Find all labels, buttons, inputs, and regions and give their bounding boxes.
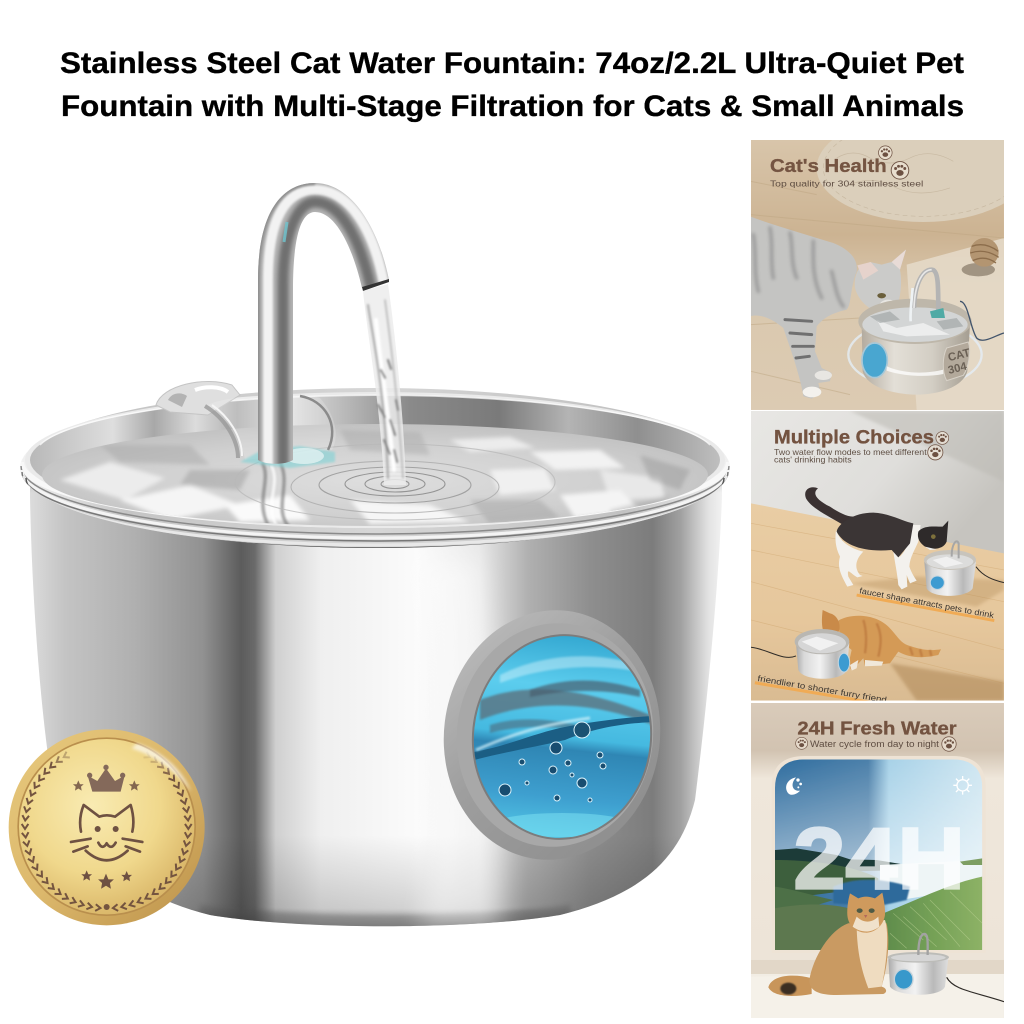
subheading with paw icons	[796, 737, 956, 751]
orange tabby cat	[822, 610, 941, 671]
large 24H text: 24H	[793, 810, 965, 907]
subheading	[774, 449, 927, 464]
panel: Multiple Choices	[751, 411, 1004, 706]
mini fountain: CAT	[947, 347, 972, 364]
panel: Cat's Health	[751, 140, 1004, 410]
mini fountain	[888, 934, 1004, 1002]
curved faucet	[258, 183, 389, 464]
moon icon	[786, 777, 802, 795]
wood floor	[751, 503, 1004, 701]
handwritten note with orange highlight: friendlier to shorter furry friend	[757, 673, 888, 705]
rug	[816, 140, 1004, 222]
handwritten note with orange highlight: faucet shape attracts pets to drink	[859, 585, 996, 620]
main product: stainless steel fountain	[20, 175, 740, 935]
fountain body	[30, 470, 740, 935]
title: Stainless Steel Cat Water Fountain: 74oz/2.2L Ultra-Quiet Pet	[60, 47, 964, 80]
ginger cat	[768, 893, 888, 996]
arch window frame	[776, 756, 982, 770]
upper mini fountain	[924, 541, 1004, 596]
title: Fountain with Multi-Stage Filtration for Cats & Small Animals	[61, 90, 964, 123]
cat face icon	[71, 805, 142, 860]
crown	[87, 765, 125, 792]
lower mini fountain	[751, 629, 850, 679]
grey tabby cat	[750, 216, 906, 399]
heading: Multiple Choices	[774, 427, 934, 448]
heading: 24H Fresh Water	[797, 718, 957, 739]
panel: 24H Fresh Water	[751, 703, 1004, 1018]
floor background	[751, 140, 1004, 410]
subheading: Top quality for 304 stainless steel	[770, 178, 923, 188]
laurel wreath	[22, 752, 192, 911]
wall	[751, 411, 1004, 554]
heading: Cat's Health	[770, 155, 887, 176]
bowl rim	[20, 388, 730, 548]
subheading with paw icons: Water cycle from day to night	[810, 739, 940, 749]
clear filter housing	[156, 382, 336, 468]
title	[60, 47, 964, 123]
gloss highlight	[132, 743, 192, 792]
subheading: Two water flow modes to meet different	[774, 447, 927, 457]
water stream	[363, 284, 406, 485]
ripples	[235, 444, 555, 520]
stars	[73, 780, 140, 889]
subheading: cats' drinking habits	[774, 455, 852, 465]
water level window	[444, 610, 660, 860]
paw icons	[879, 146, 909, 179]
water surface	[42, 424, 708, 528]
scratch ball	[962, 238, 999, 276]
mini fountain	[858, 270, 1004, 395]
room background	[751, 703, 1004, 976]
gold medal badge	[9, 729, 205, 925]
bowl glow ring	[847, 333, 983, 379]
arch window landscape	[775, 759, 982, 950]
mini fountain: 304	[947, 361, 969, 377]
black and white cat	[805, 487, 948, 589]
paw icons	[928, 432, 949, 460]
sun icon	[953, 776, 972, 795]
